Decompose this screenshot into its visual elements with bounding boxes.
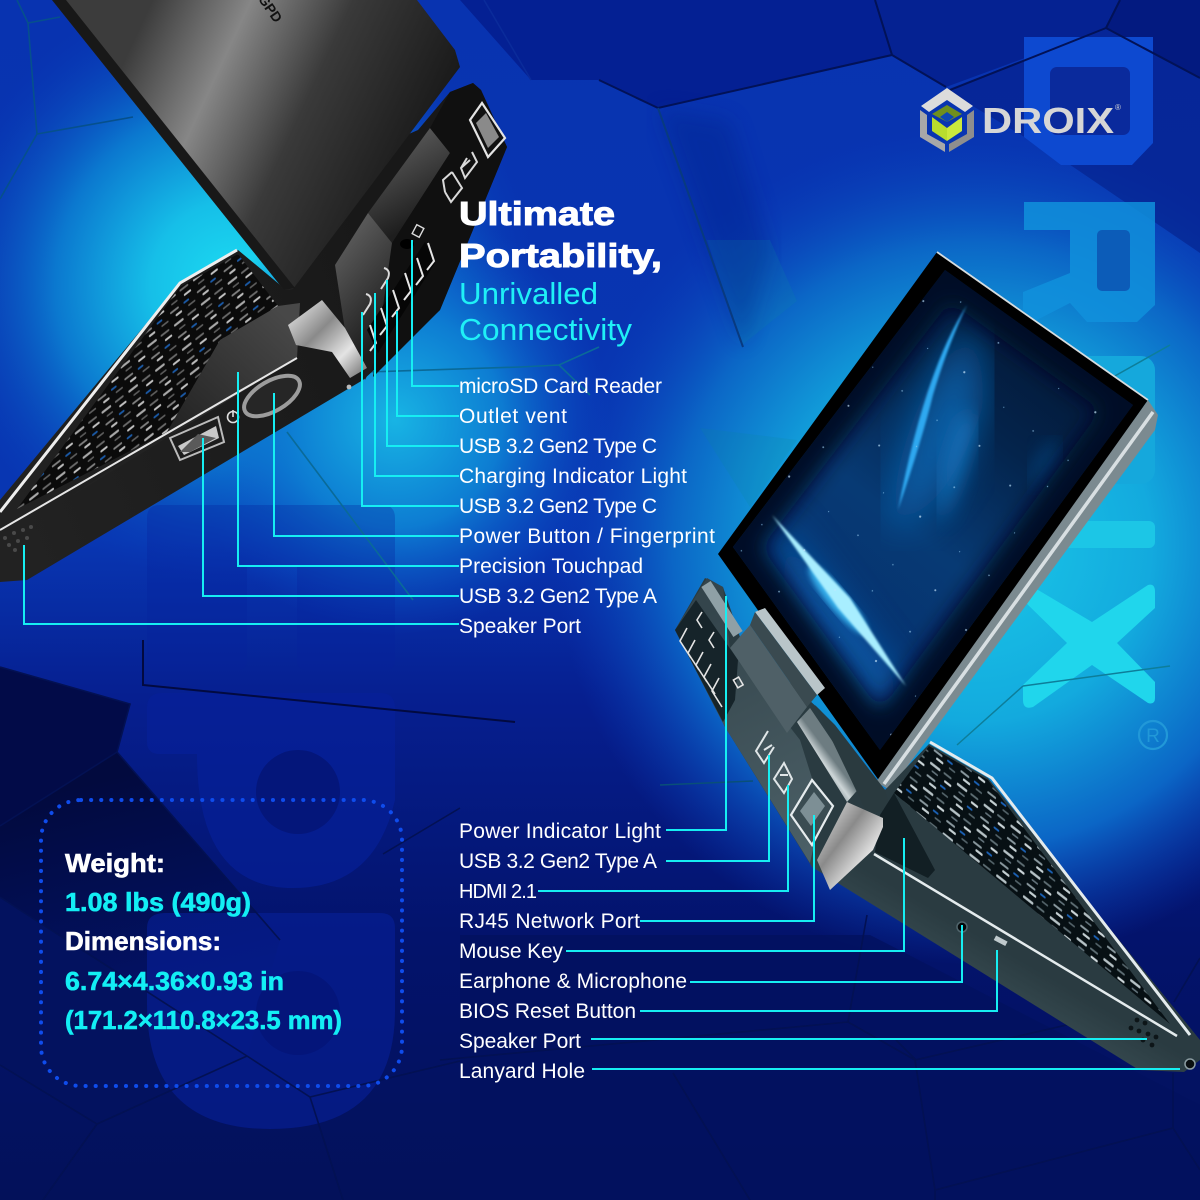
port labels: bottom group: HDMI 2.1	[459, 881, 537, 903]
hinge chrome	[817, 802, 883, 890]
reset label	[994, 936, 1008, 946]
leader lines: top group	[24, 240, 459, 624]
port labels: top group: Charging Indicator Light	[459, 465, 687, 488]
hinge block	[368, 128, 450, 243]
front edge stripe	[874, 854, 1177, 1036]
port labels: top group: USB 3.2 Gen2 Type A	[459, 585, 657, 608]
USB-C ports	[363, 268, 389, 315]
hinge upper strip	[755, 608, 825, 695]
keyboard white trim	[930, 742, 1190, 1035]
hinge bar	[706, 584, 738, 634]
grey side panel	[335, 213, 420, 380]
heading: Unrivalled	[459, 276, 598, 311]
logo: ®	[1115, 103, 1121, 112]
port labels: top group	[459, 375, 715, 638]
USB port	[443, 172, 462, 202]
keyboard white trim	[0, 250, 237, 512]
logo: DROIX	[982, 100, 1114, 141]
side port panel	[675, 578, 822, 863]
port labels: top group: Outlet vent	[459, 405, 567, 428]
screen display	[733, 270, 1133, 750]
audio jack	[957, 922, 967, 932]
port labels: top group: Precision Touchpad	[459, 555, 643, 578]
leader lines: bottom group	[538, 596, 1180, 1069]
port labels: top group: Speaker Port	[459, 615, 581, 638]
laptop: dark unit, top-left	[0, 0, 507, 582]
RJ45 port	[791, 780, 833, 845]
facet: top right corner	[1106, 0, 1200, 78]
USB port	[756, 731, 774, 763]
lower streak	[772, 515, 906, 686]
palm rest and touchpad area	[70, 303, 300, 497]
fingerprint button	[238, 368, 306, 424]
speaker holes	[1129, 1018, 1158, 1047]
status LED	[347, 385, 351, 389]
RJ45 port	[470, 103, 505, 157]
watermark: vertical DROIX lettering: R	[1146, 726, 1160, 747]
panel: weight and dimensions: 6.74×4.36×0.93 in	[65, 966, 284, 996]
screen lid	[718, 252, 1158, 790]
keyboard	[894, 746, 1170, 1024]
lower streak core glow	[806, 566, 870, 637]
facet: dark upper-left	[0, 667, 130, 826]
laptop: grey unit, right	[675, 252, 1200, 1072]
watermark: lower-left blocks	[147, 505, 395, 1129]
port labels: bottom group: Power Indicator Light	[459, 820, 661, 843]
front edge stripe	[0, 358, 297, 530]
port labels: bottom group: Speaker Port	[459, 1030, 581, 1053]
nebula faint streak	[1030, 440, 1060, 490]
dark edge vignette	[733, 270, 1133, 750]
mouse key panel	[875, 793, 935, 878]
star field	[740, 300, 1096, 736]
port labels: top group: Power Button / Fingerprint	[459, 525, 715, 548]
port labels: top group: USB 3.2 Gen2 Type C	[459, 495, 657, 518]
port labels: bottom group: BIOS Reset Button	[459, 1000, 636, 1023]
microSD slot	[400, 225, 424, 249]
USB-A port	[170, 417, 224, 460]
logo mark	[920, 88, 974, 152]
port labels: bottom group: Mouse Key	[459, 940, 564, 963]
facet: teal panel left	[700, 428, 797, 507]
panel: weight and dimensions: 1.08 lbs (490g)	[65, 887, 251, 917]
port labels: bottom group: RJ45 Network Port	[459, 910, 640, 933]
port labels: bottom group: Earphone & Microphone	[459, 970, 687, 993]
heading: Portability,	[459, 237, 662, 274]
vent slats	[367, 242, 435, 353]
hinge dark block	[815, 705, 890, 815]
port labels: bottom group: USB 3.2 Gen2 Type A	[459, 850, 657, 873]
panel: weight and dimensions: Dimensions:	[65, 926, 221, 956]
base body	[0, 83, 507, 582]
facet: right shaded	[946, 28, 1200, 253]
nebula bright arc	[898, 305, 967, 510]
facet: teal panels	[707, 240, 797, 345]
dark vent panel	[675, 600, 738, 722]
port labels: top group: USB 3.2 Gen2 Type C	[459, 435, 657, 458]
base body	[675, 578, 1200, 1072]
keyboard	[17, 254, 278, 509]
heading	[459, 195, 662, 347]
panel: weight and dimensions: Weight:	[65, 848, 165, 878]
facet: lower navy band	[460, 935, 1200, 1200]
facet: top right navy	[875, 0, 1120, 87]
nebula soft streak	[940, 410, 975, 525]
hinge recess	[750, 612, 817, 707]
lower glow	[770, 510, 905, 730]
port labels: bottom group: Lanyard Hole	[459, 1060, 585, 1083]
lid	[52, 0, 460, 290]
facet: shadow beside crack	[658, 108, 770, 347]
HDMI port	[461, 152, 477, 178]
heading: Connectivity	[459, 312, 633, 347]
port labels: bottom group	[459, 820, 687, 1083]
lanyard hole	[1185, 1059, 1195, 1069]
hinge plate	[730, 625, 807, 733]
HDMI port	[774, 763, 792, 793]
panel: weight and dimensions: (171.2×110.8×23.5 mm)	[65, 1005, 342, 1035]
heading: Ultimate	[459, 195, 615, 232]
black port panel	[373, 83, 507, 377]
power icon	[228, 410, 238, 422]
speaker holes	[3, 525, 33, 552]
screen hinge ridge	[797, 708, 862, 802]
facet: dark triangle	[0, 752, 280, 1056]
facet: top centre navy	[460, 0, 892, 108]
facet: bottom-left	[0, 897, 247, 1124]
panel: weight and dimensions	[41, 800, 402, 1086]
port labels: top group: microSD Card Reader	[459, 375, 662, 398]
hinge chrome	[288, 300, 367, 378]
nebula glow	[890, 320, 985, 530]
logo	[920, 88, 1121, 152]
watermark: vertical DROIX lettering	[1023, 37, 1167, 749]
vent slats	[680, 612, 743, 707]
